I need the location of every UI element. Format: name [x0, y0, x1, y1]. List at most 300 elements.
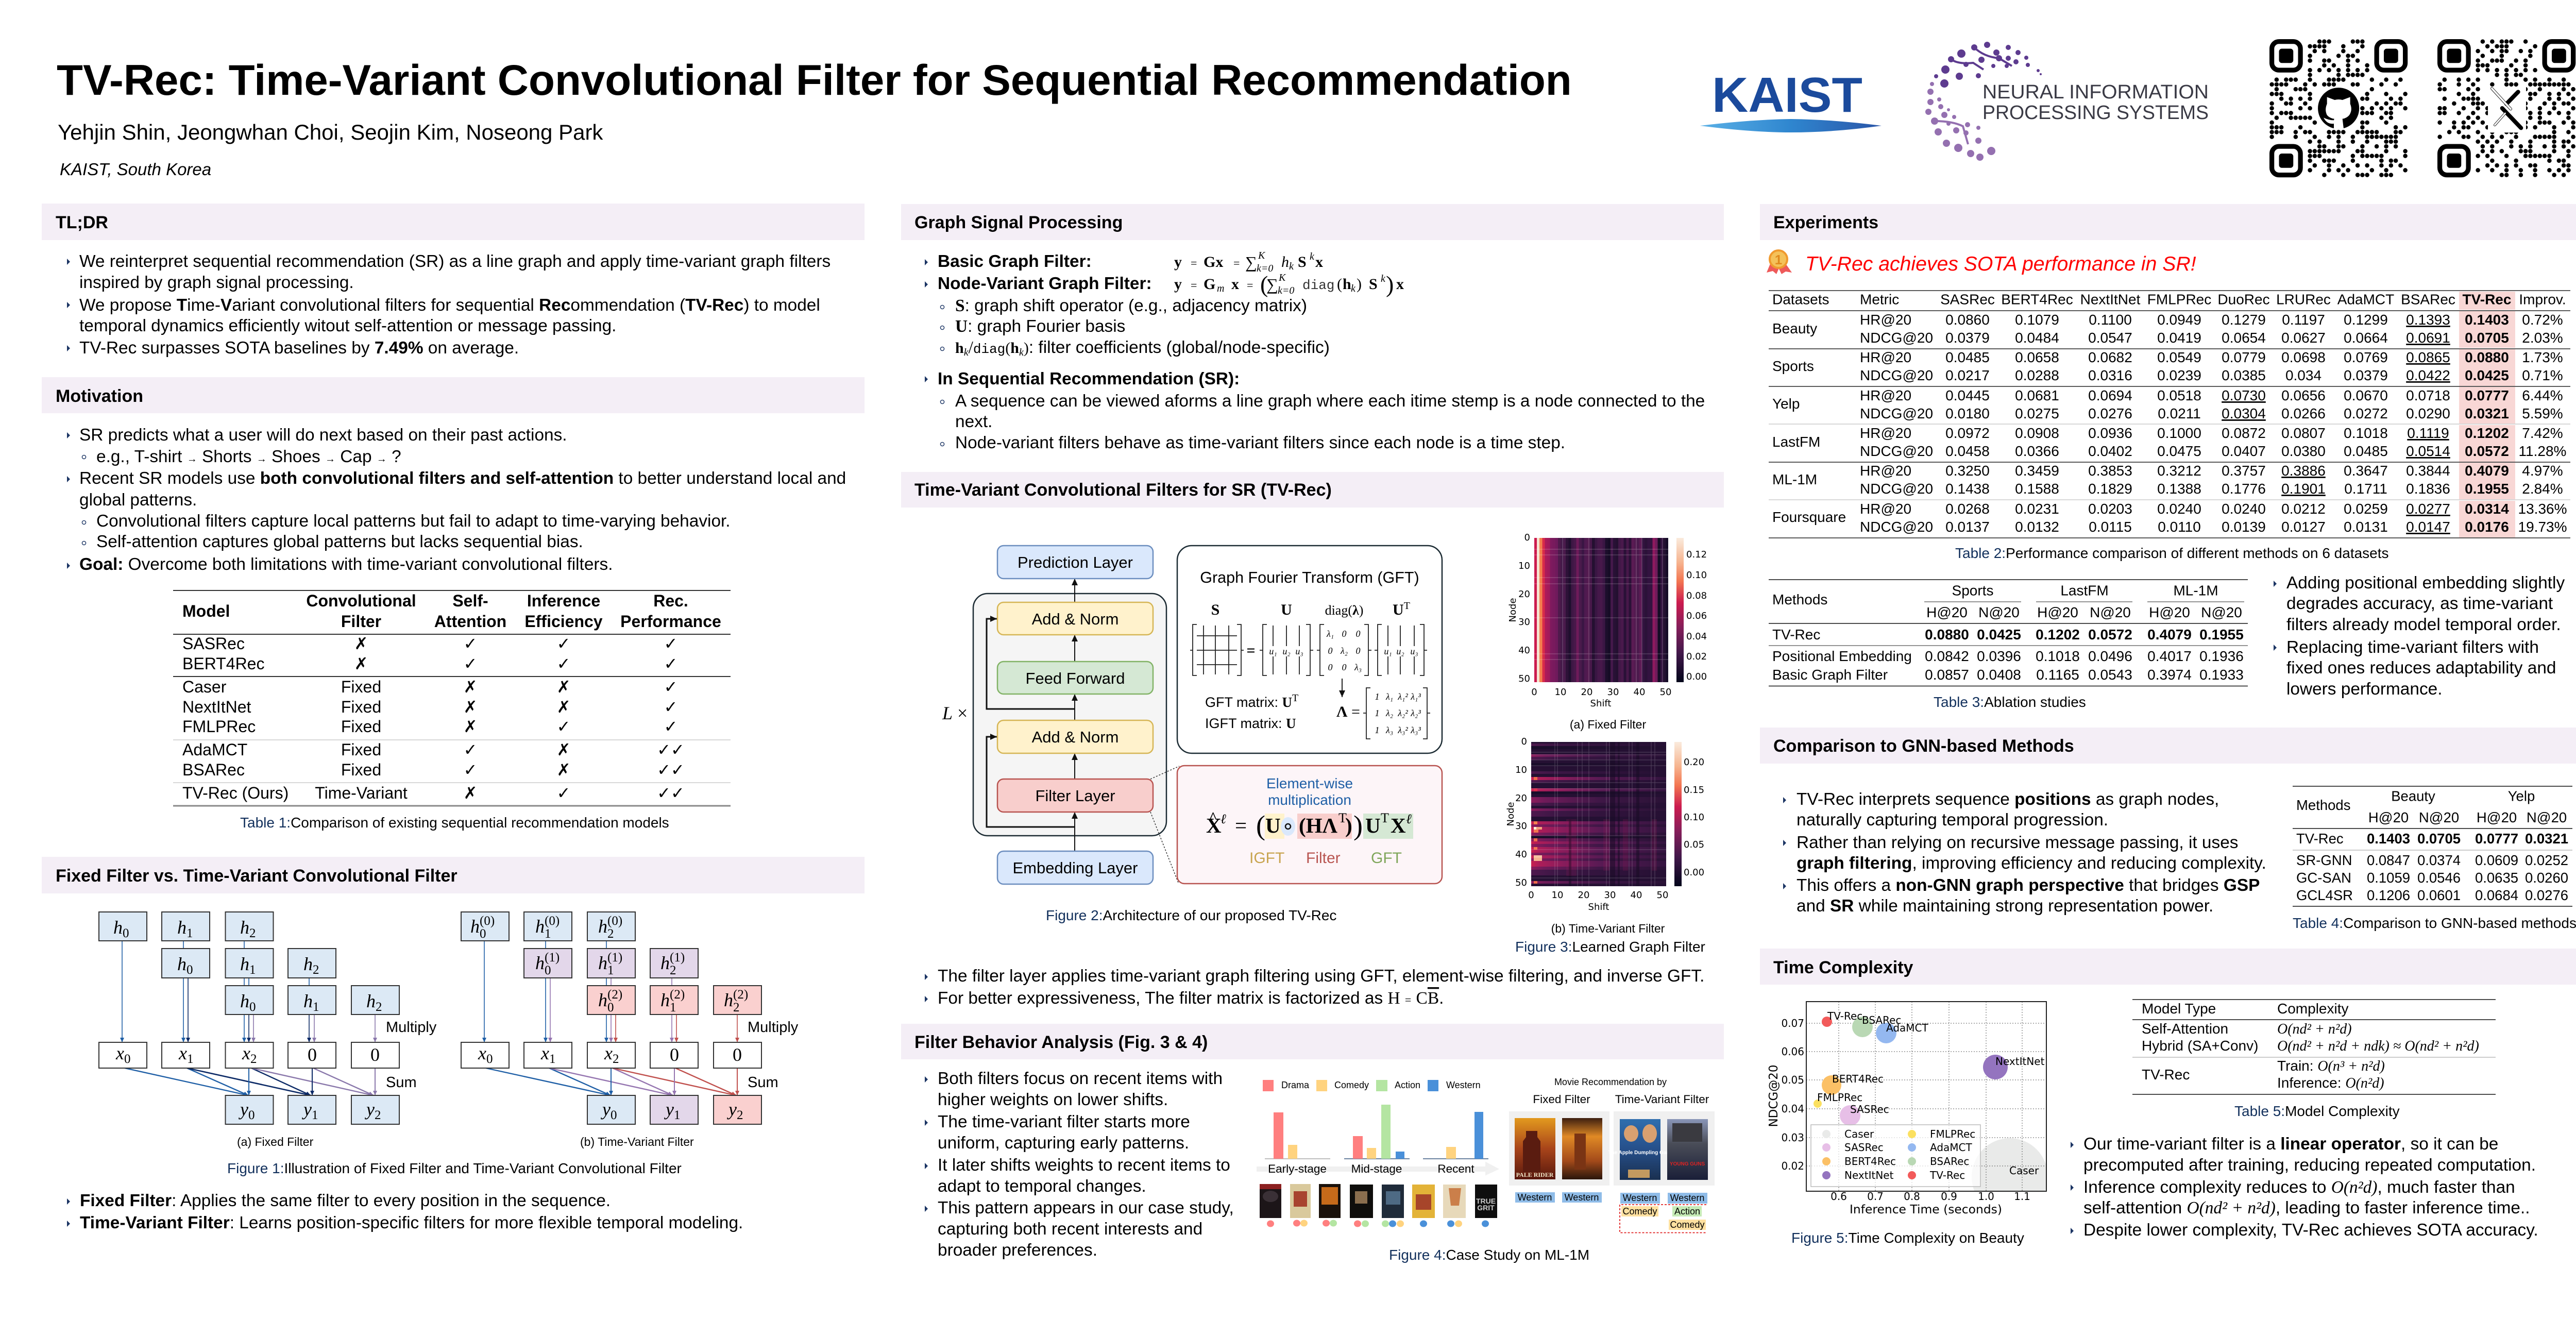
- table 2: performance comparison: 0.0304: [2222, 405, 2266, 421]
- table 2: performance comparison: NDCG@20: [1860, 519, 1933, 535]
- panel: graph Fourier transform: u₃: [1295, 646, 1303, 656]
- table 4: GNN comparison: 0.0546: [2417, 870, 2461, 886]
- panel: graph Fourier transform: 0: [1328, 646, 1332, 656]
- table 2: performance comparison: 0.0127: [2281, 519, 2326, 535]
- diagram: fixed filter: 0: [248, 1108, 255, 1122]
- heatmap: time-variant filter: Node: [1505, 802, 1516, 826]
- diagram: time-variant filter: y: [666, 1099, 674, 1120]
- panel: graph Fourier transform: λ₂: [1385, 708, 1393, 718]
- table 2: performance comparison: 0.0485: [2344, 443, 2388, 459]
- table 2: performance comparison: 0.0180: [1945, 405, 1990, 421]
- text block: behavior bullets: adapt to temporal changes.: [938, 1177, 1146, 1196]
- panel: element-wise filter equation: GFT: [1371, 850, 1402, 867]
- diagram: fixed filter: y: [240, 1099, 248, 1120]
- formula: basic graph filter: ∑: [1245, 253, 1257, 272]
- table 2: performance comparison: 0.0314: [2465, 501, 2509, 517]
- table 2: performance comparison: 0.0691: [2406, 330, 2450, 346]
- box: prediction layer: [997, 546, 1153, 579]
- heading: Graph Signal Processing: Graph Signal Processing: [914, 213, 1123, 232]
- table 3: ablation studies: 0.1933: [2199, 667, 2244, 683]
- panel: graph Fourier transform: U: [1393, 601, 1404, 618]
- table 2: performance comparison: 1.73%: [2522, 349, 2563, 365]
- callout: SOTA: TV-Rec achieves SOTA performance in SR!: [1805, 253, 2196, 275]
- legend: scatter models: Caser: [1844, 1128, 1874, 1140]
- table 1: comparison of models: ✓✓: [657, 760, 685, 780]
- heading: Time-Variant Convolutional Filters: Time-Variant Convolutional Filters for SR (TV-Rec): [914, 480, 1332, 500]
- text block: GSP bullets: In Sequential Recommendation (SR):: [938, 369, 1240, 388]
- table 3: ablation studies: 0.0543: [2088, 667, 2132, 683]
- table 2: performance comparison: 0.0549: [2157, 349, 2201, 365]
- heatmap: time-variant filter: 30: [1604, 890, 1616, 901]
- table 5: model complexity: Model Type: [2142, 1001, 2216, 1017]
- table 2: performance comparison: 0.0681: [2015, 387, 2059, 403]
- table 2: performance comparison: 0.0484: [2015, 330, 2059, 346]
- diagram: fixed filter: 0: [370, 1044, 380, 1065]
- table 2: performance comparison: 0.3853: [2088, 463, 2132, 479]
- case study: movie recommendation: The Apple Dumpling Gang: [1608, 1150, 1673, 1156]
- diagram: architecture stack: [942, 546, 1166, 884]
- table 3: ablation studies: Methods: [1772, 591, 1827, 607]
- table 1: comparison of models: FMLPRec: [182, 717, 256, 736]
- panel: graph Fourier transform: λ₃: [1354, 662, 1362, 672]
- formula: node-variant graph filter: =: [1247, 279, 1253, 292]
- text block: filter bullets: Time-Variant Filter: Learns position-specific filters for more flexible temporal modeling.: [80, 1213, 743, 1232]
- text block: ablation bullets: degrades accuracy, as time-variant: [2286, 594, 2553, 613]
- text block: GNN bullets: graph filtering, improving efficiency and reducing complexity.: [1797, 854, 2266, 873]
- table 3: ablation studies: N@20: [2090, 604, 2131, 620]
- table 2: performance comparison: 0.0240: [2157, 501, 2201, 517]
- formula: basic graph filter: K: [1258, 250, 1266, 261]
- formula: node-variant graph filter: K: [1278, 272, 1286, 283]
- diagram: time-variant filter: 1: [549, 1052, 555, 1066]
- panel: graph Fourier transform: 1: [1375, 725, 1380, 735]
- table 3: ablation studies: Sports: [1952, 582, 1993, 599]
- diagram: time-variant filter: x: [604, 1043, 613, 1063]
- table 3: ablation studies: 0.0880: [1925, 627, 1969, 642]
- table 2: performance comparison: Beauty: [1772, 320, 1817, 336]
- diagram: fixed filter: 1: [187, 926, 193, 940]
- scatter chart: inference time vs NDCG: 0.05: [1781, 1074, 1804, 1086]
- text block: TL;DR bullets: We propose Time-Variant convolutional filters for sequential Recommendation (TV-Rec) to model: [79, 296, 820, 315]
- table 4: GNN comparison: H@20: [2368, 809, 2409, 825]
- diagram: time-variant filter: h: [470, 916, 480, 937]
- heatmap: fixed filter: 20: [1518, 589, 1530, 600]
- legend: scatter models: SASRec: [1844, 1141, 1884, 1154]
- table 2: performance comparison: 0.0240: [2222, 501, 2266, 517]
- diagram: fixed filter: 2: [250, 1052, 257, 1066]
- text block: behavior bullets: higher weights on lower shifts.: [938, 1090, 1168, 1109]
- text block: GSP bullets: k: [1019, 347, 1024, 358]
- heatmap: fixed filter: Shift: [1590, 698, 1611, 709]
- text block: GSP bullets: h: [955, 340, 964, 357]
- table 2: performance comparison: TV-Rec: [2463, 292, 2511, 307]
- panel: graph Fourier transform: u₂: [1396, 646, 1404, 656]
- table 1: comparison of models: Fixed: [341, 760, 381, 779]
- text block: GSP bullets: S: graph shift operator (e.g., adjacency matrix): [955, 296, 1307, 315]
- panel: TL;DR: [42, 204, 865, 358]
- legend: genres: [1263, 1080, 1481, 1091]
- formula: basic graph filter: x: [1315, 253, 1323, 270]
- panel: graph Fourier transform: 0: [1342, 662, 1347, 672]
- formula: basic graph filter: Gx: [1204, 253, 1223, 270]
- table 2: performance comparison: BSARec: [2401, 292, 2455, 307]
- heatmap: fixed filter: Node: [1507, 598, 1518, 622]
- table 2: performance comparison: 0.0277: [2406, 501, 2450, 517]
- panel: element-wise filter equation: multiplication: [1268, 792, 1351, 808]
- table 1: comparison of models: Fixed: [341, 740, 381, 759]
- text block: Motivation bullets: Goal: Overcome both limitations with time-variant convolutional filters.: [79, 555, 613, 574]
- table 2: performance comparison: HR@20: [1860, 463, 1911, 479]
- table 2: performance comparison: SASRec: [1940, 292, 1995, 307]
- table 2: performance comparison: NextItNet: [2080, 292, 2141, 307]
- diagram: time-variant filter: (0): [545, 914, 560, 928]
- heatmap: fixed filter: [1507, 532, 1707, 731]
- table 3: ablation studies: H@20: [2037, 604, 2078, 620]
- panel: graph Fourier transform: u₂: [1282, 646, 1291, 656]
- formula: node-variant graph filter: (: [1260, 271, 1268, 297]
- heatmap: time-variant filter: 50: [1657, 890, 1668, 901]
- heading: Motivation: Motivation: [56, 386, 143, 406]
- affiliation: KAIST, South Korea: [60, 160, 211, 179]
- formula: node-variant graph filter: diag: [1302, 278, 1334, 293]
- table 1: comparison of models: AdaMCT: [182, 740, 247, 759]
- diagram: time-variant filter: 0: [670, 1044, 679, 1065]
- table 4: GNN comparison: Yelp: [2508, 788, 2535, 804]
- diagram: fixed filter: x: [242, 1043, 250, 1063]
- tag: western fixed 1: Western: [1518, 1192, 1552, 1203]
- panel: graph Fourier transform: λ₂: [1340, 646, 1348, 656]
- scatter chart: inference time vs NDCG: TV-Rec: [1827, 1010, 1862, 1022]
- table 4: GNN comparison: N@20: [2419, 809, 2459, 825]
- heatmap: time-variant filter: Shift: [1588, 902, 1609, 912]
- caption: figure 1: Figure 1:Illustration of Fixed Filter and Time-Variant Convolutional Filter: [227, 1160, 682, 1176]
- table 2: performance comparison: 0.0239: [2157, 367, 2201, 383]
- diagram: time-variant filter: 0: [611, 1108, 617, 1122]
- heatmap: time-variant filter: (b) Time-Variant Filter: [1551, 922, 1665, 935]
- table 2: performance comparison: 0.0664: [2344, 330, 2388, 346]
- table 5: model complexity: [2132, 1000, 2496, 1094]
- box: filter layer: Filter Layer: [1035, 787, 1115, 805]
- diagram: time-variant filter: 1: [674, 1108, 680, 1122]
- table 1: comparison of models: ✓: [664, 634, 677, 653]
- text block: GSP bullets: [925, 252, 1705, 452]
- table 1: comparison of models: ✓: [464, 634, 477, 653]
- formula: basic graph filter: y: [1174, 253, 1182, 270]
- box: embedding layer: Embedding Layer: [1013, 859, 1138, 877]
- table 3: ablation studies: 0.1165: [2036, 667, 2079, 683]
- table 4: GNN comparison: N@20: [2527, 809, 2567, 825]
- text block: Motivation bullets: Self-attention captures global patterns but lacks sequential bias.: [96, 532, 583, 551]
- heatmap: fixed filter: 30: [1518, 617, 1530, 628]
- icon: medal: [1767, 250, 1792, 274]
- table 3: ablation studies: 0.4017: [2147, 648, 2192, 664]
- panel: graph Fourier transform: S: [1211, 601, 1219, 618]
- diagram: time-variant filter: (1): [545, 951, 560, 965]
- table 2: performance comparison: BERT4Rec: [2001, 292, 2073, 307]
- formula: basic graph filter: =: [1233, 257, 1240, 269]
- table 2: performance comparison: 0.3886: [2281, 463, 2326, 479]
- table 5: model complexity: Complexity: [2277, 1001, 2348, 1017]
- text block: TL;DR bullets: [67, 252, 831, 358]
- table 2: performance comparison: 0.0422: [2406, 367, 2450, 383]
- logo: NeurIPS: NEURAL INFORMATION: [1982, 81, 2209, 103]
- tag: action: Action: [1674, 1206, 1700, 1216]
- diagram: time-variant filter: 2: [607, 927, 614, 941]
- legend: scatter models: NextItNet: [1844, 1169, 1894, 1181]
- diagram: fixed filter: Multiply: [386, 1019, 437, 1036]
- heading: Comparison to GNN-based Methods: Comparison to GNN-based Methods: [1773, 736, 2074, 756]
- diagram: time-variant filter: h: [660, 953, 670, 973]
- table 2: performance comparison: 0.0730: [2222, 387, 2266, 403]
- diagram: time-variant filter: Multiply: [748, 1019, 799, 1036]
- table 2: performance comparison: 0.0936: [2088, 425, 2132, 441]
- table 2: performance comparison: 0.1711: [2344, 481, 2387, 497]
- diagram: fixed filter: h: [240, 954, 249, 974]
- text block: ablation bullets: fixed ones reduces adaptability and: [2286, 658, 2556, 678]
- diagram: time-variant filter: (2): [670, 988, 685, 1002]
- table 2: performance comparison: 0.1438: [1945, 481, 1990, 497]
- legend: scatter models: BERT4Rec: [1844, 1155, 1896, 1168]
- table 1: comparison of models: ✗: [557, 740, 570, 759]
- scatter chart: inference time vs NDCG: 0.7: [1867, 1190, 1884, 1203]
- table 4: GNN comparison: 0.0252: [2525, 852, 2568, 868]
- diagram: time-variant filter: h: [724, 990, 733, 1010]
- diagram: fixed filter: 0: [308, 1044, 317, 1065]
- table 2: performance comparison: 0.0419: [2157, 330, 2201, 346]
- formula: basic graph filter: k: [1310, 251, 1315, 262]
- caption: table 4: Table 4:Comparison to GNN-based methods: [2293, 915, 2576, 931]
- box: add and norm bottom: Add & Norm: [1032, 728, 1118, 746]
- heatmap: fixed filter: 0.02: [1686, 651, 1707, 662]
- table 2: performance comparison: 0.0458: [1945, 443, 1990, 459]
- text block: GSP bullets: diag(h: [973, 340, 1019, 357]
- diagram: fixed filter: 2: [376, 1000, 382, 1014]
- table 2: performance comparison: NDCG@20: [1860, 330, 1933, 346]
- table 2: performance comparison: 2.84%: [2522, 481, 2563, 497]
- heading: Fixed Filter vs. Time-Variant: [42, 857, 865, 893]
- table 3: ablation studies: 0.0496: [2088, 648, 2132, 664]
- box: filter layer: [997, 779, 1153, 812]
- table 2: performance comparison: 0.1393: [2406, 312, 2450, 328]
- heatmap: time-variant filter: 40: [1515, 849, 1527, 860]
- logo: NeurIPS: [1925, 42, 2209, 161]
- formula: node-variant graph filter: x: [1231, 276, 1239, 293]
- table 2: performance comparison: HR@20: [1860, 501, 1911, 517]
- text block: Motivation bullets: Convolutional filters capture local patterns but fail to adapt to time-varying behavior.: [96, 512, 731, 531]
- legend: scatter models: TV-Rec: [1929, 1169, 1965, 1181]
- table 1: comparison of models: ✓: [464, 740, 477, 759]
- table 2: performance comparison: 0.0518: [2157, 387, 2201, 403]
- table 2: performance comparison: 0.0779: [2222, 349, 2266, 365]
- table 2: performance comparison: 0.0654: [2222, 330, 2266, 346]
- table 1: comparison of models: ✗: [354, 654, 368, 673]
- table 2: performance comparison: 0.0475: [2157, 443, 2201, 459]
- bar chart: genre by stage: Early-stage: [1268, 1162, 1327, 1175]
- table 4: GNN comparison: 0.0684: [2475, 887, 2518, 903]
- tag: western fixed 2: Western: [1565, 1192, 1599, 1203]
- table 2: performance comparison: 0.1079: [2015, 312, 2059, 328]
- table 5: model complexity: O(nd² + n²d): [2277, 1021, 2352, 1037]
- heading: TL;DR: TL;DR: [56, 213, 108, 232]
- formula: basic graph filter: h: [1281, 253, 1289, 270]
- text block: TL;DR bullets: temporal dynamics efficiently witout self-attention or message passing.: [79, 316, 616, 335]
- scatter chart: inference time vs NDCG: 1.1: [2014, 1190, 2030, 1203]
- diagram: fixed filter: x: [179, 1043, 187, 1063]
- text block: behavior bullets: Both filters focus on recent items with: [938, 1069, 1223, 1088]
- table 4: GNN comparison: Beauty: [2391, 788, 2435, 804]
- diagram: fixed filter: h: [113, 917, 123, 938]
- table 2: performance comparison: 0.0705: [2465, 330, 2509, 346]
- QR code: X: [2440, 42, 2574, 175]
- diagram: fixed filter: 0: [187, 963, 193, 977]
- text block: Motivation bullets: [67, 426, 846, 574]
- table 2: performance comparison: HR@20: [1860, 349, 1911, 365]
- table 2: performance comparison: 0.0547: [2088, 330, 2132, 346]
- table 3: ablation studies: 0.0408: [1977, 667, 2021, 683]
- table 2: performance comparison: Datasets: [1772, 292, 1829, 307]
- table 1: comparison of models: Efficiency: [524, 612, 603, 631]
- panel: Time-Variant Convolutional Filters: [901, 472, 1724, 1008]
- table 3: ablation studies: Positional Embedding: [1772, 648, 1912, 664]
- table 2: performance comparison: ML-1M: [1772, 471, 1817, 487]
- table 5: model complexity: O(nd² + n²d + ndk) ≈ O(nd² + n²d): [2277, 1038, 2479, 1054]
- table 1: comparison of models: Fixed: [341, 678, 381, 696]
- text block: GSP bullets: next.: [955, 412, 992, 431]
- case study: movie recommendation: Fixed Filter: [1533, 1093, 1590, 1106]
- table 5: model complexity: Self-Attention: [2142, 1021, 2228, 1037]
- box: prediction layer: Prediction Layer: [1018, 553, 1133, 571]
- table 3: ablation studies: 0.3974: [2147, 667, 2192, 683]
- diagram: fixed filter: 1: [313, 1000, 319, 1014]
- panel: graph Fourier transform: λ₃: [1385, 725, 1393, 735]
- heading: Graph Signal Processing: [901, 204, 1724, 240]
- table 2: performance comparison: 0.0572: [2465, 443, 2509, 459]
- diagram: time-variant filter: y: [602, 1099, 611, 1120]
- heatmap: fixed filter: 0.00: [1686, 671, 1707, 682]
- authors: Yehjin Shin, Jeongwhan Choi, Seojin Kim, Noseong Park: [58, 120, 603, 144]
- table 1: comparison of models: Fixed: [341, 717, 381, 736]
- heatmap: time-variant filter: 40: [1631, 890, 1642, 901]
- heatmap: time-variant filter: 50: [1515, 877, 1527, 888]
- table 1: comparison of models: Caser: [182, 678, 227, 696]
- tag: western time-variant 1: Western: [1623, 1193, 1657, 1203]
- text block: GSP bullets: /: [969, 338, 974, 357]
- table 4: GNN comparison: 0.0260: [2525, 870, 2568, 886]
- formula: node-variant graph filter: m: [1217, 283, 1224, 294]
- table 4: GNN comparison: 0.0374: [2417, 852, 2461, 868]
- tag: comedy: Comedy: [1622, 1206, 1657, 1216]
- table 1: comparison of models: Inference: [527, 591, 600, 610]
- table 4: GNN comparison: 0.0705: [2417, 831, 2461, 847]
- diagram: time-variant filter: 0: [480, 927, 486, 941]
- heatmap: fixed filter: 40: [1634, 687, 1645, 698]
- caption: table 2: Table 2:Performance comparison of different methods on 6 datasets: [1955, 545, 2389, 561]
- table 2: performance comparison: 0.0110: [2158, 519, 2201, 535]
- table 2: performance comparison: 0.0670: [2344, 387, 2388, 403]
- table 1: comparison of models: ✗: [464, 717, 477, 736]
- heatmap: time-variant filter: 0.20: [1684, 757, 1704, 768]
- table 2: performance comparison: 0.1776: [2222, 481, 2266, 497]
- diagram: fixed filter: h: [240, 917, 249, 938]
- tag: comedy 2: Comedy: [1670, 1220, 1705, 1230]
- heatmap: time-variant filter: 20: [1578, 890, 1589, 901]
- table 1: comparison of models: Rec.: [653, 591, 688, 610]
- QR code: GitHub: [2272, 42, 2406, 175]
- connector: filter layer to detail: [1150, 766, 1179, 883]
- heatmap: fixed filter: 0.10: [1686, 570, 1707, 581]
- heatmap: fixed filter: 50: [1518, 673, 1530, 684]
- table 1: comparison of models: ✓: [664, 677, 677, 697]
- panel: element-wise filter equation: Element-wise: [1266, 775, 1353, 791]
- diagram: time-variant filter: (0): [480, 914, 495, 928]
- text block: GSP bullets: : filter coefficients (global/node-specific): [1029, 338, 1330, 357]
- heatmap: fixed filter: 0.12: [1686, 549, 1707, 560]
- diagram: fixed filter: h: [366, 991, 376, 1011]
- text block: GSP bullets: A sequence can be viewed aforms a line graph where each itime stemp is a node connected to the: [955, 392, 1705, 411]
- text block: ablation bullets: [2274, 573, 2565, 699]
- table 2: performance comparison: 0.1279: [2222, 312, 2266, 328]
- table 2: performance comparison: 0.1100: [2089, 312, 2132, 328]
- table 4: GNN comparison: 0.1059: [2367, 870, 2410, 886]
- table 2: performance comparison: 0.1836: [2406, 481, 2450, 497]
- text block: GSP bullets: k: [964, 347, 969, 358]
- panel: graph Fourier transform: GFT matrix: U: [1205, 695, 1292, 710]
- table 2: performance comparison: 0.0656: [2281, 387, 2326, 403]
- table 3: ablation studies: 0.0572: [2088, 627, 2132, 642]
- panel: element-wise filter equation: T: [1338, 810, 1347, 825]
- table 3: ablation studies: 0.1955: [2199, 627, 2244, 642]
- table 3: ablation studies: 0.1018: [2036, 648, 2080, 664]
- text block: Motivation bullets: Recent SR models use both convolutional filters and self-attention to better understand local and: [79, 469, 846, 488]
- panel: graph Fourier transform: λ₁: [1385, 691, 1393, 702]
- caption: table 5: Table 5:Model Complexity: [2234, 1103, 2400, 1119]
- text block: filter layer bullets: [925, 967, 1704, 1008]
- table 2: performance comparison: 0.0380: [2281, 443, 2326, 459]
- icon: medal: 1: [1775, 252, 1782, 267]
- table 2: performance comparison: 0.1901: [2281, 481, 2326, 497]
- title: TV-Rec: Time-Variant Convolutional Filter for Sequential Recommendation: [57, 56, 1572, 104]
- panel: element-wise filter equation: =: [1235, 814, 1247, 837]
- table 2: performance comparison: 0.0217: [1945, 367, 1990, 383]
- table 3: ablation studies: 0.0396: [1977, 648, 2021, 664]
- legend: genres: Drama: [1281, 1080, 1310, 1090]
- table 5: model complexity: Train: O(n³ + n²d): [2277, 1058, 2385, 1074]
- case study: movie recommendation: Movie Recommendation by: [1554, 1077, 1667, 1087]
- diagram: time-variant filter: 2: [613, 1052, 619, 1066]
- text block: behavior bullets: This pattern appears in our case study,: [938, 1198, 1234, 1217]
- table 2: performance comparison: 0.0211: [2158, 405, 2201, 421]
- table 1: comparison of models: ✓: [664, 654, 677, 673]
- diagram: fixed filter: x: [116, 1043, 124, 1063]
- movie posters row with genre dots: [1260, 1184, 1497, 1227]
- panel: graph Fourier transform: u₁: [1269, 646, 1277, 656]
- caption: table 3: Table 3:Ablation studies: [1934, 694, 2086, 710]
- diagram: fixed filter: y: [303, 1099, 312, 1120]
- formula: node-variant graph filter: G: [1204, 276, 1215, 293]
- panel: element-wise filter equation: ℓ: [1221, 811, 1226, 826]
- caption: table 1: Table 1:Comparison of existing sequential recommendation models: [240, 815, 669, 831]
- table 3: ablation studies: TV-Rec: [1772, 627, 1820, 642]
- diagram: fixed filter: (a) Fixed Filter: [237, 1135, 314, 1148]
- scatter chart: inference time vs NDCG: 0.02: [1781, 1160, 1804, 1172]
- table 2: performance comparison: NDCG@20: [1860, 367, 1933, 383]
- diagram: fixed filter: 2: [249, 926, 256, 940]
- table 4: GNN comparison: TV-Rec: [2296, 831, 2344, 847]
- table 2: performance comparison: 0.0425: [2465, 367, 2509, 383]
- panel: element-wise filter equation: U: [1365, 814, 1381, 837]
- diagram: time-variant filter: h: [598, 916, 607, 937]
- table 2: performance comparison: 0.0872: [2222, 425, 2266, 441]
